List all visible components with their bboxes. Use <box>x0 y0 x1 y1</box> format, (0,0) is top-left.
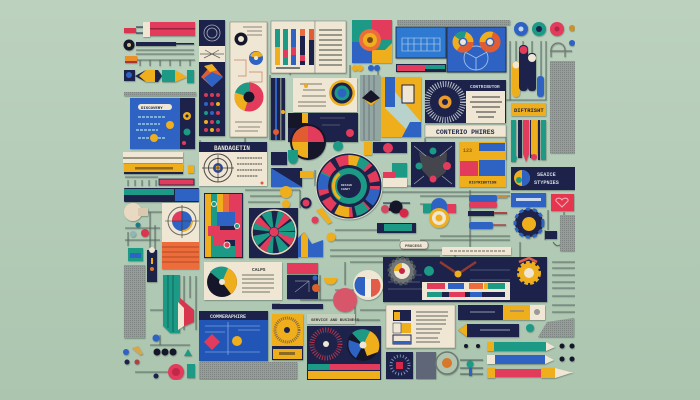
cream header <box>307 314 360 324</box>
donut chart <box>239 87 259 107</box>
small parts: lower left <box>123 334 192 378</box>
ring icon <box>436 352 458 374</box>
panel: blue grid <box>396 27 446 58</box>
molecule cluster <box>381 200 410 218</box>
pencil blue <box>487 355 554 364</box>
cream header: SERVICE AND BUSINESS <box>311 319 360 323</box>
dial and yellow tag <box>364 142 407 155</box>
panel: dark circle collage <box>288 113 358 160</box>
red and navy tile <box>287 263 318 299</box>
circuit nodes <box>130 222 149 237</box>
navy stripe <box>272 304 323 309</box>
icon row circles <box>514 22 575 46</box>
panel: dark dashboard with gears <box>383 257 547 302</box>
small dots row <box>352 65 380 71</box>
cream table <box>422 282 510 300</box>
orange stub pen <box>125 56 137 63</box>
cream tags: PROCESS <box>405 245 422 249</box>
panel: cream ring chart card <box>293 78 357 112</box>
infographic collage <box>123 20 575 380</box>
stacked bar <box>396 64 446 72</box>
teal drop <box>288 150 298 164</box>
blue label <box>511 193 546 207</box>
teal and red tiles <box>383 163 407 187</box>
panel: commerce blue <box>199 311 268 361</box>
flag globe <box>353 270 383 300</box>
icon: heart tile <box>551 194 574 211</box>
title bar: contents <box>425 125 506 137</box>
panel: yellow concentric <box>272 314 303 360</box>
small dots column <box>312 276 337 292</box>
cream tags <box>400 241 511 255</box>
coloured pens <box>511 120 546 162</box>
teal gauge <box>460 360 483 376</box>
floating dots <box>280 186 336 242</box>
lower gray block <box>560 215 575 251</box>
yellow label <box>511 103 546 116</box>
panel: starburst <box>425 80 506 123</box>
small bolts <box>464 344 574 362</box>
gray strip <box>397 20 510 25</box>
small square <box>545 231 557 239</box>
panel: service strategies: STYPNIES <box>534 180 559 186</box>
panel: blue twin donuts <box>447 27 506 72</box>
blue tile with tab <box>271 168 313 187</box>
cream and yellow bars <box>123 152 194 174</box>
panel: starburst: CONTRIBUTOR <box>470 84 500 90</box>
panel: dark network <box>411 142 455 187</box>
red button <box>168 364 195 380</box>
multicolor square <box>352 20 392 63</box>
yellow and blue peaks <box>298 208 332 257</box>
icon: diamond <box>201 64 223 87</box>
panel: yellow block chart: 123 <box>463 148 472 154</box>
icon: flower gear <box>515 209 543 237</box>
navy pencil <box>458 324 519 337</box>
pink ball <box>333 288 357 312</box>
panel: dark wheel <box>249 208 298 258</box>
panel: pie card <box>204 262 282 300</box>
panel: target with orange <box>162 203 199 269</box>
pens group <box>468 195 507 229</box>
panel: yellow geometric <box>381 77 421 137</box>
cream ball <box>124 203 148 221</box>
panel: target card <box>199 142 267 186</box>
pencil teal <box>487 342 555 351</box>
teal dot <box>526 324 534 332</box>
panel: bar columns sheet <box>271 21 315 73</box>
pen with black ring <box>124 40 194 50</box>
panel: cream doc <box>386 305 455 348</box>
gray square <box>416 352 436 379</box>
title bar: contents: CONTERIO PHIRES <box>436 129 495 136</box>
icon: gray gear <box>389 258 415 284</box>
panel: service strategies: SEAICE <box>537 172 556 178</box>
navy yellow bar <box>458 305 545 320</box>
red bar <box>159 179 194 185</box>
panel: yellow block chart: DISTRIBUTION <box>469 182 497 186</box>
panel: blue card <box>124 92 196 149</box>
panel: text sheet <box>315 21 346 73</box>
teal slats and fan <box>163 275 194 333</box>
panel: burst and pie <box>307 326 381 380</box>
panel: target card: BANDAGETIN <box>214 145 250 152</box>
panel: colour puzzle <box>204 193 243 258</box>
panel: service strategies <box>511 167 575 190</box>
gray band <box>199 362 297 379</box>
geometric strip <box>124 70 194 83</box>
gray textured panel left <box>124 265 145 338</box>
yellow label: DIFTRISHT <box>514 107 544 114</box>
big colour wheel: DESIGN <box>341 184 352 187</box>
gray blob <box>538 318 574 337</box>
big colour wheel <box>316 153 382 219</box>
panel: blue card: DISCOVERY <box>141 107 163 111</box>
panel: yellow block chart <box>459 142 506 187</box>
panel: pie card: CALPS <box>252 267 266 273</box>
teal bar <box>377 223 416 233</box>
gray stripes with diamond <box>360 75 380 140</box>
slider chart <box>510 41 546 100</box>
gray textured column <box>550 61 575 153</box>
panel: navy column <box>199 20 225 136</box>
icon: yellow gear <box>519 263 539 283</box>
panel: cream tall card <box>230 22 267 137</box>
teal pin <box>333 141 343 151</box>
teal box and navy tab <box>128 247 157 282</box>
small navy tile <box>271 152 287 165</box>
top-left pencil <box>124 22 195 37</box>
navy square burst <box>386 352 413 379</box>
navy strips <box>271 78 285 140</box>
circuit lines <box>125 50 575 372</box>
ring and dome <box>423 198 456 228</box>
pencil yellow red <box>487 368 574 378</box>
panel: commerce blue: COMMERAPHIRE <box>210 314 246 320</box>
big colour wheel: CHART <box>341 188 350 191</box>
teal navy bar <box>124 188 199 202</box>
icon: headphones <box>550 43 572 57</box>
